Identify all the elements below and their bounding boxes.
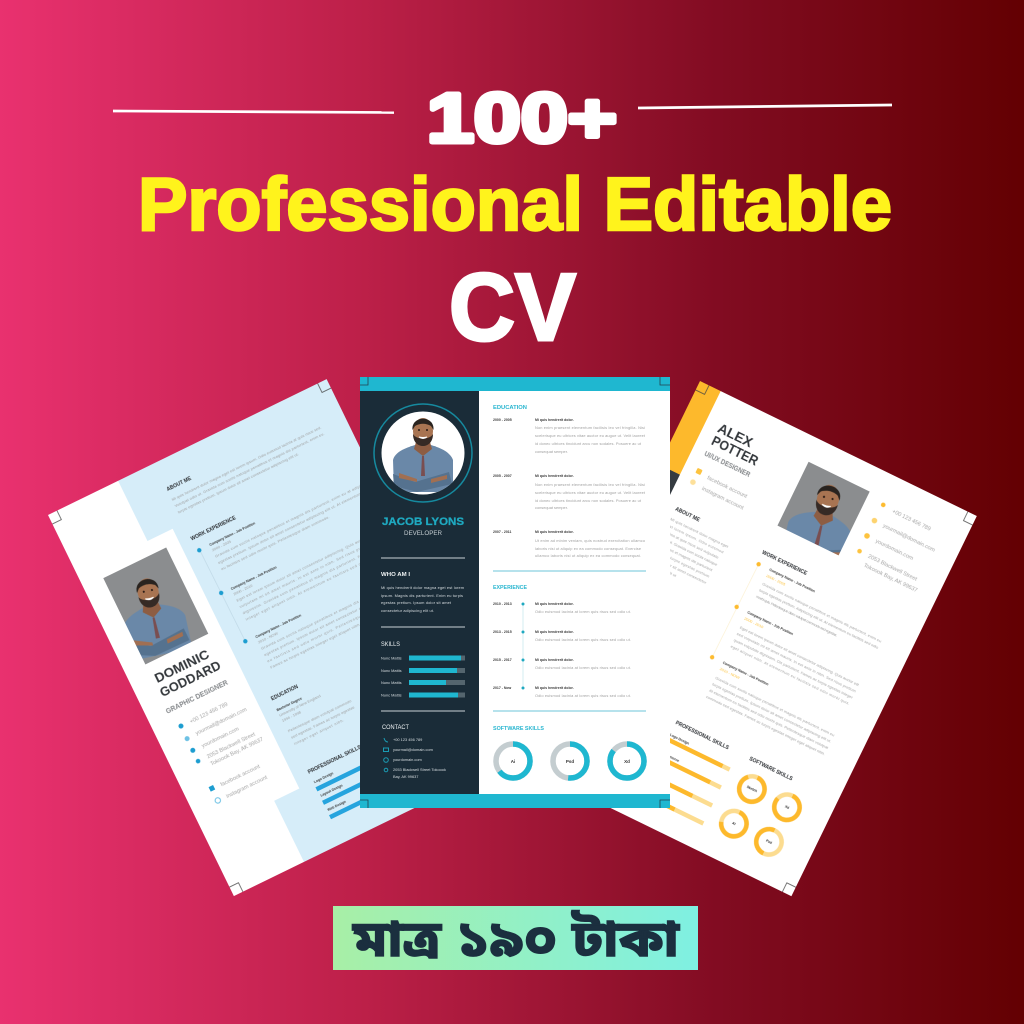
photo — [778, 462, 870, 556]
work experience: egestas pretium. Ipsum dolor sit amet consectetur adipiscing elit ut. At elementum eu facilisis — [217, 482, 381, 565]
contact list: instagram account — [225, 775, 269, 800]
education: 2007 - 2011 — [493, 530, 512, 534]
work experience: turpis egestas pretium. Ipsum dolor sit amet consectetur adipiscing elit ut. — [712, 681, 832, 744]
software skills — [493, 726, 644, 778]
education: Mi quis hendrerit dolor. — [535, 530, 574, 534]
rule: right of 100+ — [638, 105, 892, 108]
experience: Odio euismod lacinia at lorem quis risus sed odio ut. — [535, 609, 631, 614]
job title: GRAPHIC DESIGNER — [165, 680, 229, 716]
name: GODDARD — [158, 658, 223, 700]
panel: center CV Jacob Lyons — [360, 377, 670, 808]
software skills: SOFTWARE SKILLS — [748, 756, 794, 783]
software skills: Ai — [511, 759, 515, 764]
work experience: 2000 - 2010 — [232, 582, 254, 596]
work experience: turpis egestas pretium. Adipiscing elit ut. At elementum eu facilisis sed odio — [758, 587, 879, 650]
experience: Odio euismod lacinia at lorem quis risus sed odio ut. — [535, 693, 631, 698]
contact list: yourdomain.com — [201, 726, 240, 750]
education: EDUCATION — [270, 684, 300, 702]
work experience — [190, 451, 433, 676]
crop marks — [360, 377, 670, 808]
about me: Volutpat odio ut. Gravida cum sociis natoque penatibus et magnis dis parturient, enim eu. — [174, 431, 325, 508]
experience: 2015 - 2017 — [493, 658, 512, 662]
title: 100+: 100+ — [427, 79, 617, 157]
education: consequat semper. — [535, 449, 568, 454]
work experience: At elementum eu facilisis sed odio morbi quis. Pellentesque diam volutpat — [708, 688, 830, 750]
about me: lacinia at quis risus sed vulputate — [663, 529, 720, 560]
contact: yourmail@domain.com — [393, 747, 433, 752]
education: laboris nisi ut aliquip ex ea commodo consequat. Exercise — [535, 546, 641, 551]
contact list: yourmail@domain.com — [882, 523, 936, 554]
who am i: consectetur adipiscing elit ut. — [381, 608, 434, 613]
price banner: মাত্র ১৯০ টাকা — [352, 910, 680, 967]
education: Bachelor Degree — [276, 696, 303, 712]
work experience: eu facilisis sed odio morbi quis. Pellentesque diam volutpat. — [266, 598, 394, 663]
education: Mi quis hendrerit dolor. — [535, 474, 574, 478]
work experience: Gravida cum sociis natoque penatibus et magnis dis parturient, enim eu — [715, 675, 835, 737]
work experience: Company Name - Job Position — [747, 610, 794, 636]
social links — [688, 467, 751, 512]
about me: turpis egestas pretium. Ipsum dolor sit amet consectetur adipiscing elit ut. — [177, 451, 299, 515]
skills: Nunc Mattis — [381, 668, 402, 673]
social links: facebook account — [706, 475, 748, 500]
professional skills: Logo Design — [669, 733, 690, 746]
education: consequat semper. — [535, 505, 568, 510]
experience: Mi quis hendrerit dolor. — [535, 686, 574, 690]
work experience: sed vulputate mi sit amet mauris. In est ante in nibh. Sed risus pretium — [736, 631, 857, 693]
work experience: Eget est lorem ipsum dolor sit amet consectetur adipiscing. Quis auctor elit sed vulputate — [235, 519, 399, 603]
who am i: Mi quis hendrerit dolor magna eget est lorem — [381, 585, 464, 590]
name: ALEX — [715, 420, 756, 451]
professional skills — [640, 720, 739, 826]
about me — [648, 506, 735, 593]
education — [270, 666, 358, 746]
work experience: Eget est lorem ipsum dolor sit amet consectetur adipiscing. Quis auctor elit — [739, 625, 861, 688]
experience: Mi quis hendrerit dolor. — [535, 630, 574, 634]
education: 1994 - 1998 — [281, 709, 302, 723]
professional skills: Web Design — [327, 800, 347, 812]
contact: yourdomain.com — [393, 757, 422, 762]
crop marks — [48, 379, 512, 896]
experience: Mi quis hendrerit dolor. — [535, 602, 574, 606]
education: scelerisque eu ultrices vitae auctor eu augue ut. Velit laoreet — [535, 433, 646, 438]
education: ullamco laboris nisi ut aliquip ex ea commodo consequat. — [535, 553, 641, 558]
work experience: Company Name - Job Position — [230, 565, 277, 591]
skills: Nunc Mattis — [381, 680, 402, 685]
work experience: Company Name - Job Position — [769, 568, 816, 593]
portrait — [374, 404, 472, 502]
education: Pellentesque diam volutpat commodo — [287, 698, 352, 733]
software skills: SOFTWARE SKILLS — [493, 726, 544, 732]
professional skills: Layout Design — [320, 783, 343, 798]
work experience: Gravida cum sociis natoque penatibus et magnis dis parturient, enim eu — [762, 581, 882, 644]
contact list: Tokoook Bay, AK 99637 — [210, 737, 264, 768]
software skills: Ai — [731, 821, 736, 826]
contact: CONTACT — [382, 725, 409, 731]
software skills: Psd — [765, 839, 773, 845]
education: Non enim praesent elementum facilisis leo vel fringilla. Nisi — [535, 482, 645, 487]
about me: ABOUT ME — [166, 476, 193, 493]
work experience: vulputate mi sit amet mauris. In est ante in nibh. Sed risus pretium quam vulputate — [239, 526, 403, 609]
work experience: 2000 - 2010 — [744, 616, 765, 630]
work experience: Company Name - Job Position — [209, 521, 256, 547]
work experience: Company Name - Job Position — [255, 613, 302, 639]
education: Ut enim ad minim veniam, quis nostrud exercitation ullamco — [535, 538, 645, 543]
name: JACOB LYONS — [382, 516, 464, 528]
experience: 2010 - 2013 — [493, 602, 512, 606]
contact list: +00 123 456 789 — [189, 702, 229, 725]
education: 2000 - 2005 — [493, 418, 512, 422]
experience: EXPERIENCE — [493, 585, 527, 591]
work experience: integer eget aliquet nibh. At elementum eu facilisis sed odio morbi. — [245, 551, 382, 622]
about me: penatibus et magnis dis parturient — [657, 542, 714, 573]
crop marks — [515, 381, 977, 896]
skills: SKILLS — [381, 642, 400, 648]
education: scelerisque eu ultrices vitae auctor eu augue ut. Velit laoreet — [535, 490, 646, 495]
work experience: quam vulputate dignissim. Dis parturient. Fames ac turpis egestas integer — [733, 637, 854, 700]
work experience: commodo sed egestas. Fames ac turpis egestas integer eget aliquet nibh. — [705, 694, 826, 756]
work experience: Fames ac turpis egestas integer eget aliquet nibh. — [269, 621, 361, 670]
software skills: Xd — [784, 805, 790, 810]
education: id donec ultrices tincidunt arcu non sodales. Posuere ac ut — [535, 498, 642, 503]
job title: DEVELOPER — [404, 530, 442, 537]
panel: left CV Dominic Goddard — [48, 379, 414, 896]
rule: left of 100+ — [113, 111, 394, 112]
skills: Nunc Mattis — [381, 692, 402, 698]
skills: Nunc Mattis — [381, 656, 402, 660]
software skills: Sketch — [746, 785, 758, 793]
experience: Odio euismod lacinia at lorem quis risus sed odio ut. — [535, 637, 631, 642]
experience: 2017 - Now — [493, 686, 512, 690]
software skills: Xd — [624, 759, 630, 764]
education: id donec ultrices tincidunt arcu non sodales. Posuere ac ut — [535, 441, 642, 446]
contact list: Tokoook Bay, AK 99637 — [862, 563, 918, 594]
education — [493, 405, 646, 558]
contact list — [851, 501, 945, 594]
who am i: WHO AM I — [381, 572, 411, 578]
work experience: eget aliquet nibh. At elementum eu facilisis sed odio morbi quis. — [730, 644, 851, 706]
experience: Mi quis hendrerit dolor. — [535, 658, 574, 662]
work experience: eu facilisis sed odio morbi quis. Pellentesque diam commodo. — [220, 514, 330, 571]
contact list: 2053 Blackwell Street — [206, 732, 257, 760]
professional skills: Web — [643, 787, 651, 794]
software skills — [715, 756, 812, 859]
contact — [382, 725, 446, 779]
work experience: dignissim. Gravida cum penatibus et magnis dis parturient. Fames ac turpis egestas — [242, 532, 406, 615]
about me: Ipsum dolor sit amet consectetur — [651, 554, 708, 585]
contact: +00 123 456 789 — [393, 737, 422, 742]
work experience: Company Name - Job Position — [722, 661, 769, 686]
professional skills — [307, 718, 439, 819]
work experience: Gravida cum sociis natoque penatibus et magnis dis parturient, enim eu turpis egestas — [260, 567, 424, 651]
professional skills: PROFESSIONAL SKILLS — [674, 720, 730, 752]
about me: ABOUT ME — [674, 506, 701, 524]
contact list: yourmail@domain.com — [195, 707, 248, 737]
title: CV: CV — [449, 254, 576, 361]
name — [151, 645, 223, 700]
education: Mi quis hendrerit dolor. — [535, 418, 574, 422]
social links: instagram account — [701, 486, 745, 512]
panel: right CV Alex Potter — [610, 381, 977, 896]
work experience: WORK EXPERIENCE — [190, 515, 238, 542]
experience — [493, 585, 631, 698]
name — [709, 420, 767, 469]
professional skills: PROFESSIONAL SKILLS — [307, 744, 363, 776]
skills — [381, 642, 465, 698]
experience: Odio euismod lacinia at lorem quis risus sed odio ut. — [535, 665, 631, 670]
professional skills: Media — [652, 769, 662, 777]
education: 2005 - 2007 — [493, 474, 512, 478]
education: EDUCATION — [493, 405, 527, 411]
who am i: egestas pretium. Ipsum dolor sit amet — [381, 600, 452, 605]
contact list: yourdomain.com — [874, 538, 914, 562]
contact list: facebook account — [220, 764, 262, 788]
work experience: WORK EXPERIENCE — [761, 550, 808, 577]
contact list: +00 123 456 789 — [891, 509, 931, 533]
work experience: morbi quis. Pellentesque diam volutpat commodo sed egestas. — [755, 594, 838, 638]
who am i: ipsum. Magnis dis parturient. Enim eu turpis — [381, 593, 463, 598]
job title: UI/UX DESIGNER — [703, 451, 751, 479]
title: Professional Editable: Professional Editable — [138, 162, 892, 246]
work experience: 2010 - NOW — [719, 666, 741, 680]
education: University of New England — [278, 693, 321, 718]
name: DOMINIC — [152, 647, 212, 686]
professional skills: Ecommerce — [660, 751, 680, 763]
sidebar — [360, 391, 479, 794]
about me: adipiscing elit ut — [648, 560, 678, 578]
work experience: 2010 - NOW — [257, 630, 279, 645]
name: POTTER — [709, 432, 761, 469]
about me: est lorem ipsum. Odio euismod — [667, 523, 724, 554]
education: Non enim praesent elementum facilisis leo vel fringilla. Nisi — [535, 425, 645, 430]
work experience: 2000 - 2005 — [211, 539, 232, 552]
work experience — [693, 549, 895, 757]
about me: Mi quis hendrerit dolor magna eget est lorem ipsum. Odio euismod lacinia at quis risus sed. — [171, 425, 322, 502]
about me: Mi quis hendrerit dolor magna eget — [670, 516, 730, 549]
who am i — [381, 572, 464, 613]
contact list — [178, 694, 280, 805]
photo — [103, 548, 208, 664]
work experience: Gravida cum sociis natoque penatibus et magnis dis parturient, enim eu at adipiscing elit — [214, 475, 379, 559]
work experience: 2000 - 2005 — [765, 573, 786, 587]
contact: 2053 Blackwell Street Tokoook — [393, 767, 446, 772]
about me: odio ut. Gravida cum sociis natoque — [660, 535, 718, 567]
education: integer eget aliquet nibh. — [293, 717, 345, 746]
contact: Bay, AK 99637 — [393, 774, 418, 779]
education: sed egestas. Fames ac turpis egestas — [290, 704, 355, 740]
software skills: Psd — [566, 759, 574, 764]
about me: enim eu turpis egestas pretium — [654, 548, 710, 579]
work experience: egestas pretium. Ipsum dolor sit amet consectetur adipiscing elit ut. Pellentesque diam — [263, 574, 427, 657]
contact list: 2053 Blackwell Street — [867, 554, 918, 583]
experience: 2013 - 2015 — [493, 630, 512, 634]
professional skills: Logo Design — [313, 771, 334, 784]
